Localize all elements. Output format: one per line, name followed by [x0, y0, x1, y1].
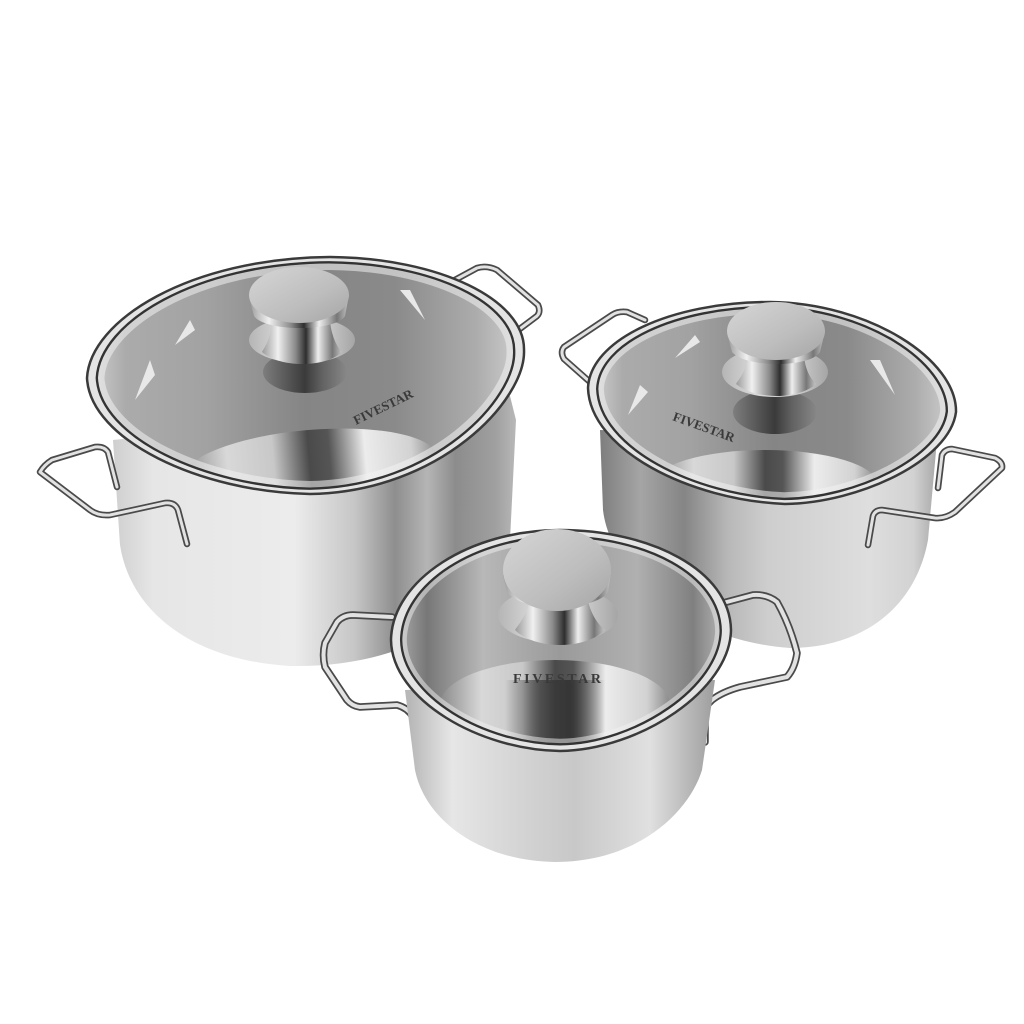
medium pot brand mark: FIVESTAR [671, 409, 738, 445]
large pot interior floor [200, 428, 428, 488]
medium pot glass lid and interior [604, 309, 940, 498]
medium pot [562, 295, 1002, 648]
large pot knob reflection [263, 358, 341, 393]
large pot glass edge glow [97, 262, 514, 489]
medium pot knob [722, 302, 828, 397]
large pot back handle [453, 267, 539, 334]
small pot right handle [705, 595, 797, 742]
large pot front handle [40, 447, 187, 544]
small pot rim [391, 530, 731, 751]
medium pot body [600, 430, 937, 648]
large pot [40, 250, 539, 666]
small pot interior floor [446, 660, 662, 743]
small pot central reflection [505, 680, 605, 745]
small pot glass edge glow [401, 537, 721, 744]
medium pot knob reflection [733, 394, 812, 434]
medium pot interior floor [673, 450, 870, 498]
large pot body [113, 396, 516, 666]
medium pot back handle [562, 312, 645, 382]
medium pot lid highlights [628, 335, 895, 415]
large pot rim [87, 257, 524, 494]
small pot knob [498, 529, 618, 645]
medium pot rim [588, 302, 956, 504]
large pot inner rim line [97, 262, 514, 489]
small pot [324, 525, 797, 862]
small pot left handle [324, 615, 425, 752]
medium pot glass edge glow [597, 307, 947, 499]
large pot knob [249, 267, 355, 364]
small pot inner rim line [401, 537, 721, 744]
small pot glass lid and interior [402, 540, 720, 744]
small pot body [405, 680, 715, 862]
large pot brand mark: FIVESTAR [351, 386, 416, 428]
large pot glass lid and interior [104, 264, 507, 488]
medium pot side handle [868, 449, 1002, 545]
small pot brand mark: FIVESTAR [513, 672, 604, 687]
large pot lid highlights [135, 290, 425, 400]
medium pot inner rim line [597, 307, 947, 499]
